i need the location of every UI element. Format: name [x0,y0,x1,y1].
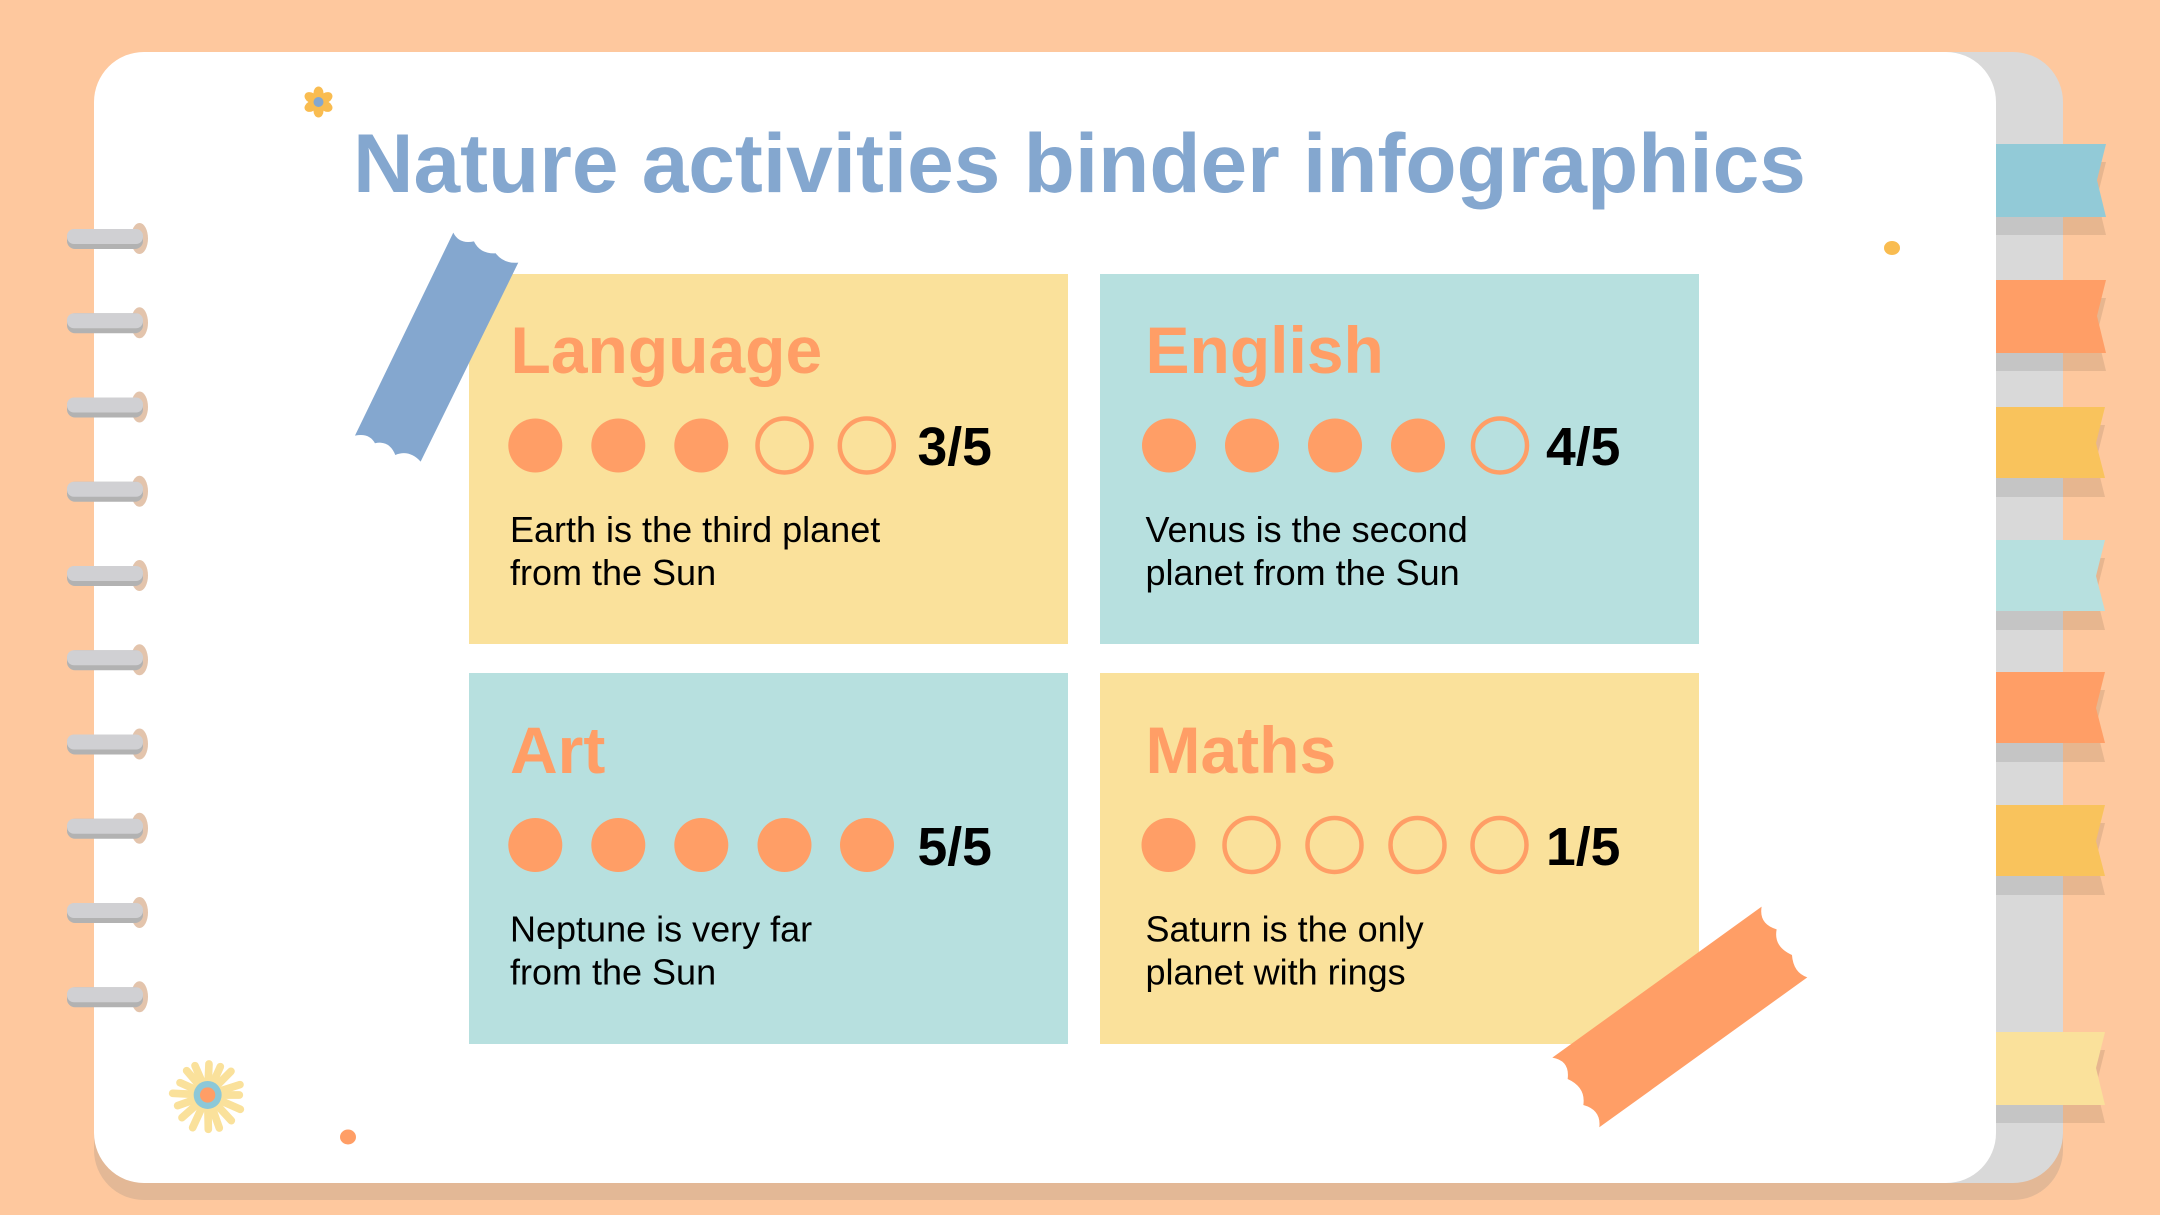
tab: orange [1996,280,2106,353]
icon: sunflower [173,1064,240,1129]
binder rings [67,223,148,1012]
score: 4/5 [1546,418,1620,477]
description: Earth is the third planet [510,509,880,550]
heading: Language: Language [510,313,822,387]
panel: Maths [1100,673,1699,1044]
title: Nature activities binder infographics [353,116,1806,210]
score: 5/5 [918,818,992,877]
washi tape: orange [1552,907,1807,1127]
index tabs [1996,144,2106,1123]
tab: teal [1996,540,2105,611]
binder back page [1900,52,2063,1183]
panel: Language [469,274,1068,644]
tab: blue [1996,144,2106,217]
icon: small flower [303,86,334,118]
description: from the Sun [510,952,716,992]
tab: orange [1996,672,2105,743]
description: planet with rings [1146,952,1406,992]
description: Saturn is the only [1146,908,1424,950]
panel: Art [469,673,1068,1044]
icon: orange dot [340,1130,356,1144]
description: from the Sun [510,552,716,593]
icon: yellow dot [1884,241,1900,255]
tab: pale yellow [1996,1032,2105,1105]
rating dots: 5 of 5 [508,818,894,872]
heading: Art: Art [510,713,605,787]
heading: Maths: Maths [1146,713,1336,787]
score: 1/5 [1546,818,1620,877]
description: planet from the Sun [1146,552,1460,593]
description: Neptune is very far [510,908,812,950]
washi tape: blue [355,233,518,462]
rating dots: 3 of 5 [508,418,894,472]
score: 3/5 [918,418,992,477]
heading: English: English [1146,313,1384,387]
rating dots: 1 of 5 [1142,818,1526,872]
rating dots: 4 of 5 [1142,418,1527,472]
tab: amber [1996,805,2105,876]
tab shadows [1996,162,2106,1123]
description: Venus is the second [1146,509,1468,550]
tab: amber [1996,407,2105,478]
panel: English [1100,274,1699,644]
